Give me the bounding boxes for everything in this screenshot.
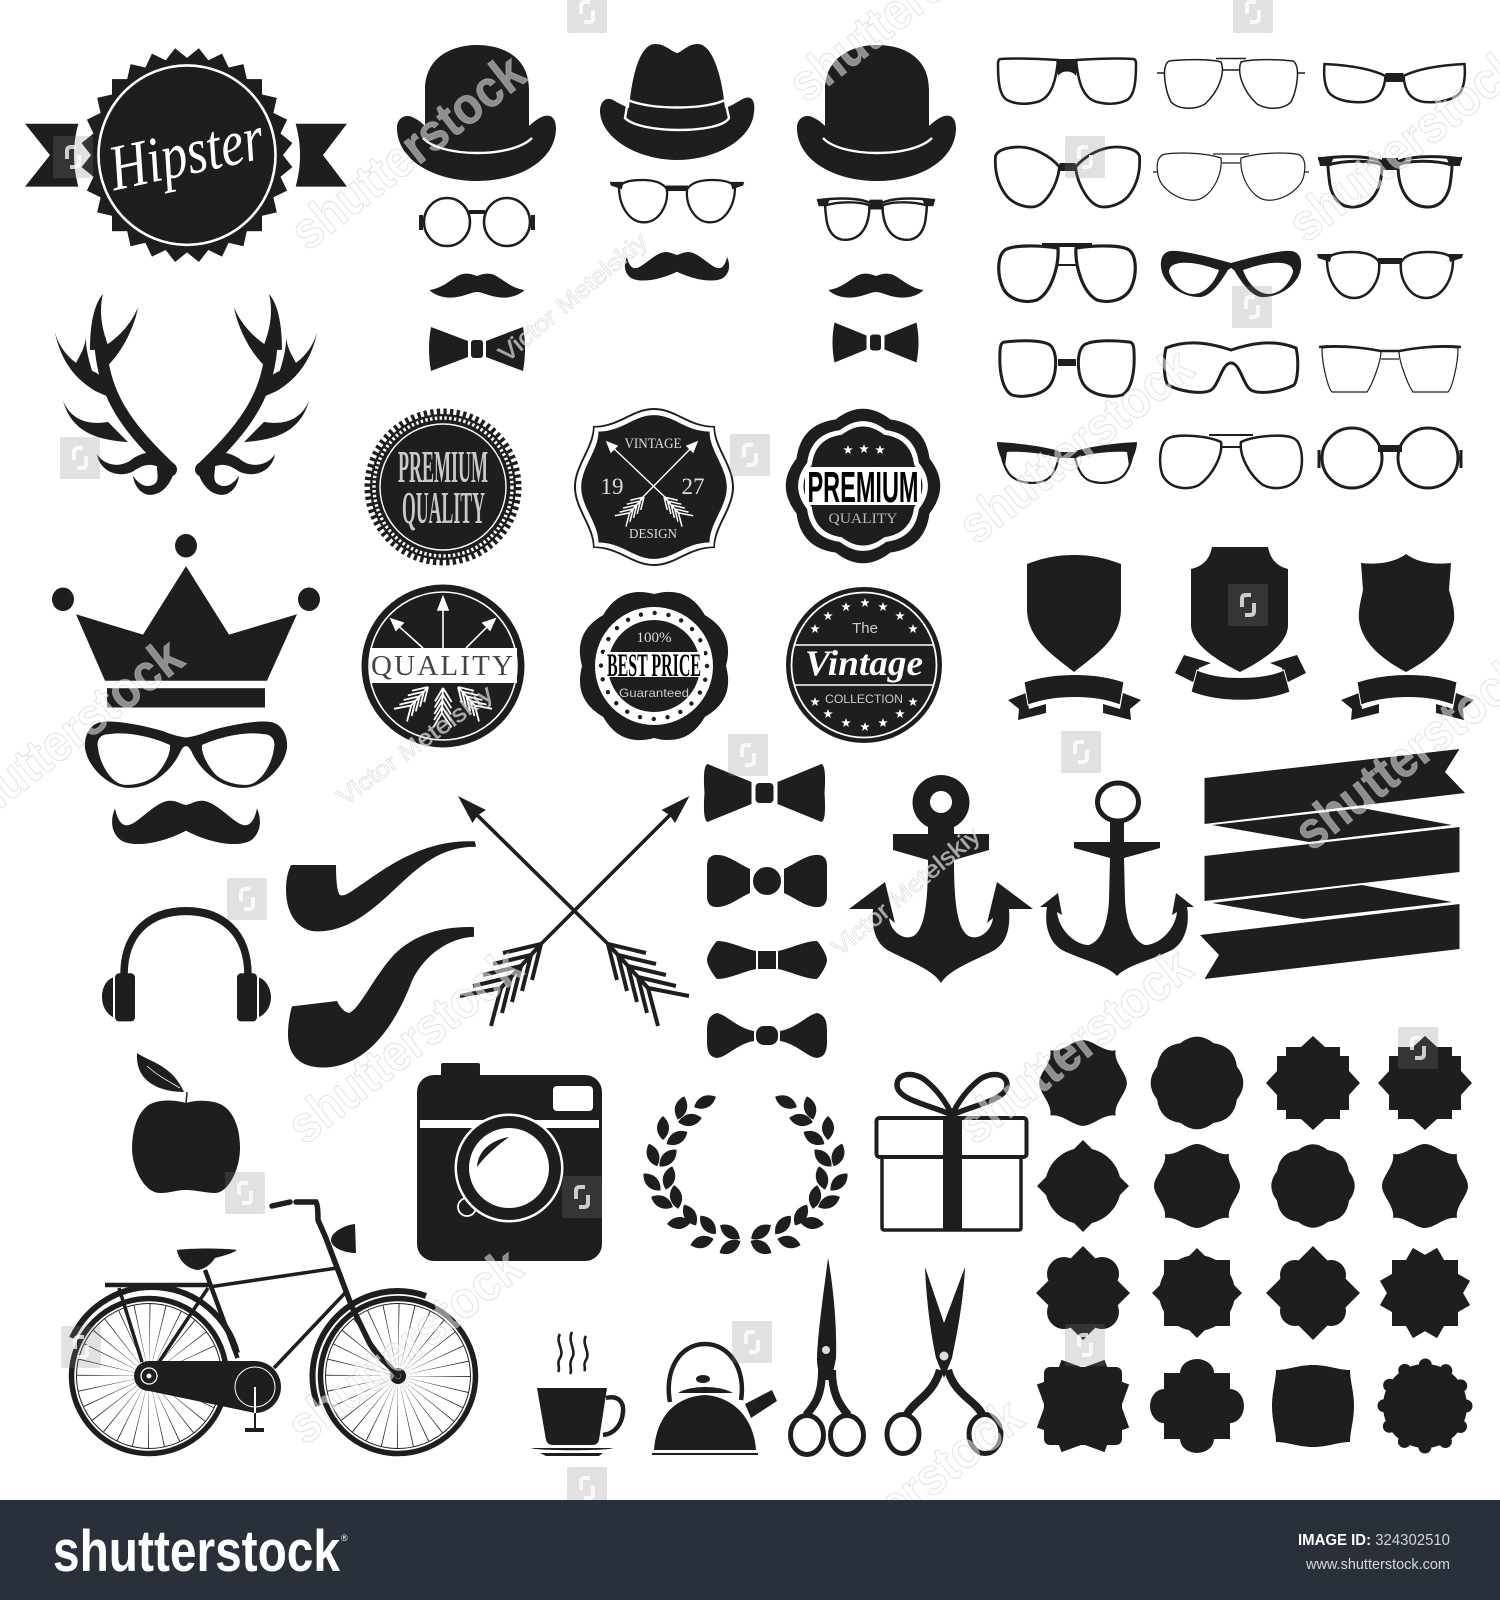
badge: Premium Quality scalloped xyxy=(786,409,940,563)
icon: bow tie 4 xyxy=(707,1013,827,1058)
Hipster lettering: Hipster xyxy=(102,101,270,204)
white band xyxy=(604,652,704,677)
glasses row 3 col 2 xyxy=(1161,251,1301,297)
QUALITY text: QUALITY xyxy=(828,511,898,527)
icon: bowler hat, left xyxy=(397,45,556,181)
three stars xyxy=(843,444,885,454)
year right: 27 xyxy=(682,474,704,499)
label 14 xyxy=(1150,1359,1244,1453)
shutterstock logo: shutterstock xyxy=(53,1519,341,1584)
frame xyxy=(119,1268,345,1368)
handlebar and fork xyxy=(272,1202,398,1376)
100% text: 100% xyxy=(636,630,672,646)
icon: wayfarers under right hat xyxy=(817,198,935,240)
icon: laurel wreath xyxy=(639,1091,852,1258)
ribbon 1 xyxy=(1008,674,1141,720)
watermark: shutterstock text: shutterstock xyxy=(277,1237,533,1455)
icon: bow tie 2 xyxy=(707,855,827,907)
glasses row 3 col 3 xyxy=(1317,252,1463,298)
white ring xyxy=(595,607,713,725)
icon: moustache under right hat xyxy=(828,274,924,298)
watermark: shutterstock text: shutterstock xyxy=(280,43,536,261)
badge: The Vintage Collection xyxy=(786,587,942,743)
website url: www.shutterstock.com xyxy=(1305,1556,1450,1573)
icon: instant camera xyxy=(417,1063,602,1261)
glasses row 4 col 3 xyxy=(1319,346,1461,392)
QUALITY text: QUALITY xyxy=(371,650,513,682)
badge: Vintage 1927 design xyxy=(574,408,734,566)
watermark: contributor name xyxy=(333,228,986,962)
ribbon 2 xyxy=(1175,655,1306,700)
disc xyxy=(362,584,524,748)
icon: glasses under fedora xyxy=(610,180,744,222)
panel: footer bar xyxy=(0,1500,1500,1600)
label 15 xyxy=(1272,1365,1354,1447)
badge: Quality arrows xyxy=(362,584,524,748)
label 13 xyxy=(1037,1360,1129,1452)
icon: bow tie 1 xyxy=(704,764,825,822)
watermark: shutterstock text: shutterstock xyxy=(778,1387,1034,1600)
watermark: shutterstock text: shutterstock xyxy=(948,337,1204,555)
left antler xyxy=(55,294,177,495)
Vintage text: Vintage xyxy=(805,643,923,683)
icon: moustache under fedora xyxy=(625,252,729,281)
crossed arrows xyxy=(607,442,697,527)
watermark: contributor name: Victor Metelskiy xyxy=(494,228,653,368)
outer scallop xyxy=(786,409,940,563)
label 12 xyxy=(1380,1248,1470,1338)
shield 3 xyxy=(1359,554,1454,672)
label 5 xyxy=(1037,1140,1129,1232)
shield 1 xyxy=(1027,555,1121,672)
label 3 xyxy=(1266,1036,1360,1130)
sunburst seal xyxy=(82,48,292,262)
label 4 xyxy=(1378,1036,1472,1130)
label 8 xyxy=(1382,1144,1468,1228)
right antler xyxy=(195,294,317,495)
The text: The xyxy=(852,620,878,637)
badge: Premium Quality seal xyxy=(368,412,518,562)
disc xyxy=(370,414,516,560)
label 7 xyxy=(1271,1144,1355,1228)
icon: bow tie under right hat xyxy=(832,322,918,362)
Guaranteed text: Guaranteed xyxy=(619,686,689,700)
icon: pipe, upper xyxy=(286,841,476,931)
glasses row 1 col 1 xyxy=(998,59,1136,104)
icon: bicycle xyxy=(72,1202,476,1454)
dotted ring xyxy=(374,418,512,556)
icon: bow tie 3 xyxy=(707,941,827,979)
registered mark: ® xyxy=(341,1533,348,1543)
three arrows xyxy=(391,597,495,736)
icon: open scissors xyxy=(887,1267,1001,1454)
COLLECTION text: COLLECTION xyxy=(825,692,903,706)
front wheel xyxy=(320,1298,476,1454)
rear wheel xyxy=(72,1298,226,1454)
mudguards xyxy=(72,1287,426,1406)
icon: crown with three balls xyxy=(52,534,320,707)
white inner line xyxy=(380,424,506,550)
ribbon 3 xyxy=(1341,674,1474,720)
watermark: shutterstock text: shutterstock xyxy=(947,937,1203,1155)
icon: gift box xyxy=(876,1075,1026,1230)
watermark: contributor name: Victor Metelskiy xyxy=(827,822,986,962)
glasses row 5 col 3 xyxy=(1319,428,1461,488)
glasses row 1 col 2 xyxy=(1157,58,1305,108)
label 10 xyxy=(1152,1248,1242,1338)
icon: crossed arrows xyxy=(458,796,690,1026)
glasses row 2 col 2 xyxy=(1153,153,1309,200)
label 16 xyxy=(1383,1364,1467,1448)
icon: fedora hat xyxy=(600,44,754,160)
white ring xyxy=(369,592,517,740)
saddle xyxy=(177,1248,237,1270)
disc xyxy=(786,587,942,743)
icon: cat-eye glasses xyxy=(85,722,287,788)
icon: slim anchor xyxy=(1040,783,1194,976)
scalloped body xyxy=(553,565,755,767)
white ring xyxy=(792,592,936,738)
badge: Hipster ribbon seal xyxy=(25,41,347,270)
band lines xyxy=(794,645,934,685)
lamp xyxy=(331,1224,356,1253)
inner scallop xyxy=(804,427,922,545)
glasses row 3 col 1 xyxy=(999,245,1135,302)
toothed edge xyxy=(368,412,518,562)
icon: large moustache xyxy=(112,801,260,844)
icon: coffee cup xyxy=(531,1332,623,1456)
panel: blank label shapes xyxy=(1036,1036,1472,1453)
glasses row 2 col 3 xyxy=(1318,157,1462,207)
glasses row 4 col 2 xyxy=(1164,343,1298,392)
icon: antlers xyxy=(55,294,317,495)
panel: glasses grid xyxy=(995,58,1465,488)
icon: folded ribbon banner xyxy=(1200,749,1465,979)
glasses row 1 col 3 xyxy=(1324,64,1465,102)
badge: Best Price: BEST PRICE xyxy=(607,648,701,684)
icon: bowler hat, right xyxy=(797,45,956,181)
label 1 xyxy=(1039,1040,1127,1126)
crank and pedal xyxy=(254,1387,256,1413)
ribbon banner xyxy=(25,124,347,187)
scalloped white outline xyxy=(74,41,300,270)
shield 2 xyxy=(1191,547,1288,672)
badge: Premium Quality seal: PREMIUM xyxy=(398,441,488,492)
DESIGN text: DESIGN xyxy=(629,527,677,542)
icon: closed scissors xyxy=(790,1258,864,1454)
white ring xyxy=(98,65,276,245)
white band xyxy=(805,467,921,505)
glasses row 5 col 1 xyxy=(997,442,1137,483)
image id: IMAGE ID: 324302510 xyxy=(1298,1532,1450,1549)
badge: Best Price xyxy=(553,565,755,767)
VINTAGE text: VINTAGE xyxy=(624,436,682,452)
PREMIUM text: PREMIUM xyxy=(808,463,918,512)
glasses row 2 col 1 xyxy=(995,147,1140,207)
icon: moustache under left hat xyxy=(430,274,524,298)
year left: 19 xyxy=(600,474,624,499)
icon: headphones xyxy=(102,911,271,1021)
watermark: shutterstock text: shutterstock xyxy=(277,937,533,1155)
badge: Premium Quality seal: QUALITY xyxy=(402,482,485,533)
icon: apple xyxy=(132,1053,240,1193)
icon: bow tie under left hat xyxy=(429,327,525,371)
plaque shape xyxy=(574,408,734,566)
white band xyxy=(370,648,517,683)
icon: pipe, lower xyxy=(288,927,474,1067)
dot ring xyxy=(601,613,707,719)
panel: shields and ribbons xyxy=(1008,547,1474,720)
ring of stars xyxy=(810,598,918,731)
label 2 xyxy=(1151,1037,1243,1129)
label 11 xyxy=(1266,1246,1360,1340)
white scallop xyxy=(798,421,928,551)
glasses row 4 col 1 xyxy=(1000,341,1134,396)
glasses row 5 col 2 xyxy=(1160,435,1302,488)
label 9 xyxy=(1036,1246,1130,1340)
icon: kettle xyxy=(652,1344,777,1455)
chain guard xyxy=(134,1361,281,1413)
icon: heavy anchor xyxy=(849,775,1033,983)
icon: round glasses under left hat xyxy=(421,198,533,246)
inner disc xyxy=(608,620,700,712)
label 6 xyxy=(1154,1144,1240,1228)
watermark: contributor name: Victor Metelskiy xyxy=(333,680,498,811)
